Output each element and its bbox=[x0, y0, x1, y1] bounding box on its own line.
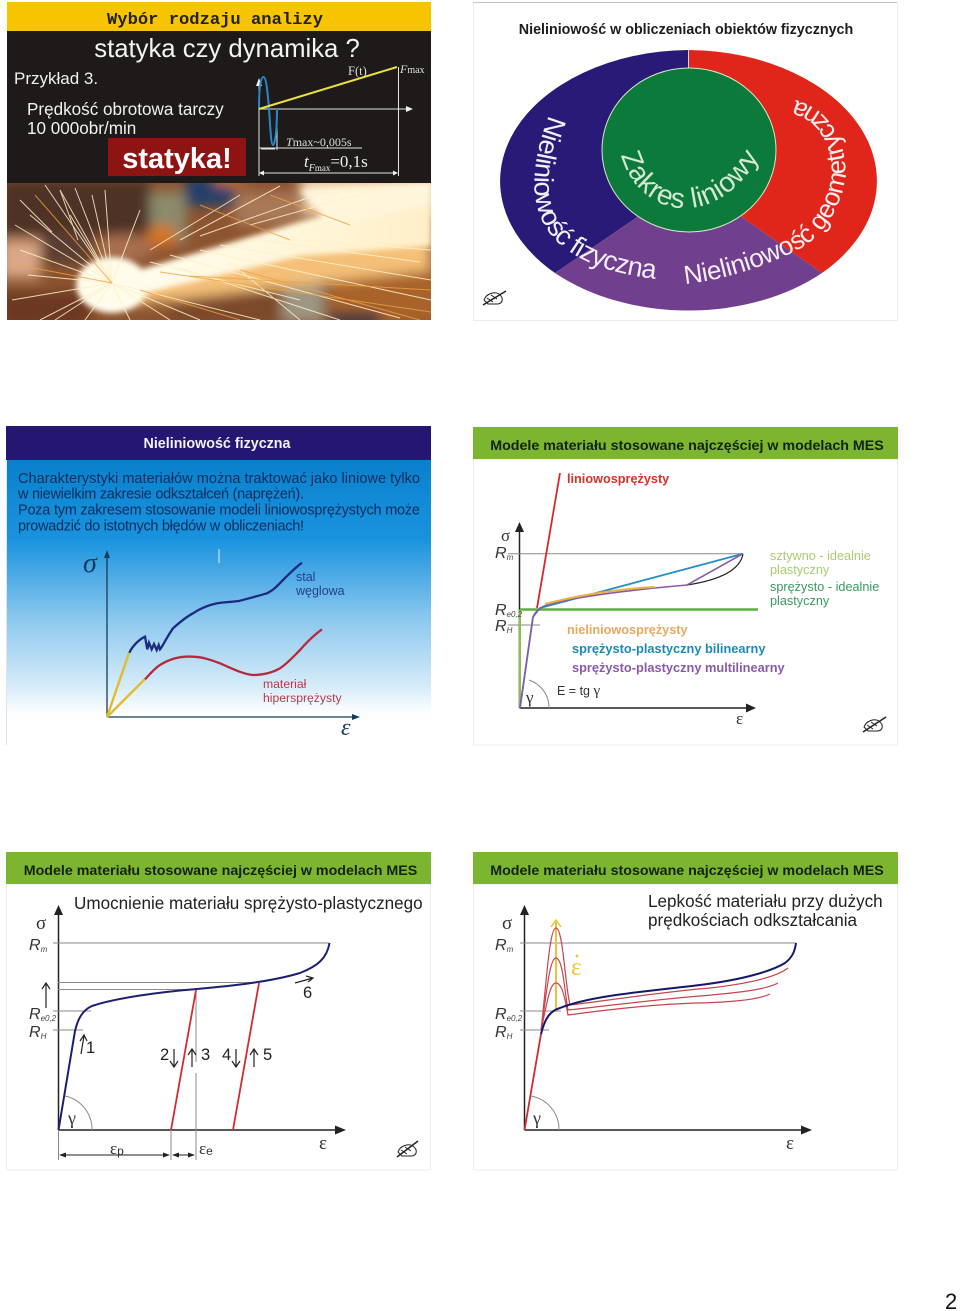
chart: strain-rate curves: R bbox=[495, 937, 507, 954]
chart: strain-rate curves: γ bbox=[532, 1108, 541, 1128]
chart: hardening curve: m bbox=[41, 945, 48, 954]
heading: hardening: Umocnienie materiału sprężysto-plastycznego bbox=[74, 894, 423, 913]
panel: umocnienie materiału bbox=[6, 852, 431, 1170]
heading: viscosity: prędkościach odkształcania bbox=[648, 911, 858, 930]
chart: hardening curve: e0,2 bbox=[41, 1014, 57, 1023]
chart: material models: γ bbox=[525, 688, 534, 707]
header band: Modele materiału stosowane najczęściej w modelach MES bbox=[490, 438, 884, 454]
chart: material models: R bbox=[495, 602, 507, 619]
chart: strain-rate curves bbox=[495, 905, 812, 1154]
label: Zakres liniowy: Zakres liniowy bbox=[621, 149, 759, 208]
chart: stress-strain curves bbox=[83, 548, 360, 741]
chart: force over time: F(t) bbox=[348, 64, 367, 78]
labels: load steps: 4 bbox=[222, 1046, 231, 1064]
chart: material models: ε bbox=[736, 709, 743, 728]
header band: Nieliniowość fizyczna bbox=[144, 436, 292, 452]
chart: strain-rate curves: m bbox=[507, 945, 514, 954]
panel: nieliniowość w obliczeniach bbox=[473, 2, 898, 321]
header band bbox=[6, 426, 431, 460]
chart: material models: R bbox=[495, 545, 507, 562]
heading: statyka czy dynamika: statyka czy dynamika ? bbox=[94, 35, 360, 63]
label: carbon steel: węglowa bbox=[295, 584, 345, 598]
callout: statyka: statyka! bbox=[122, 143, 232, 175]
header band: Modele materiału stosowane najczęściej w modelach MES bbox=[490, 863, 884, 879]
text: description: prowadzić do istotnych błędów w obliczeniach! bbox=[18, 518, 304, 534]
icon: writing hand bbox=[863, 717, 886, 732]
diagram: nonlinearity ellipse bbox=[500, 50, 877, 310]
segment: linear range bbox=[602, 68, 776, 232]
text: description: Poza tym zakresem stosowanie modeli liniowosprężystych może bbox=[18, 502, 420, 518]
panel: lepkość materiału bbox=[473, 852, 898, 1170]
chart: force over time: Tmax~0,005s bbox=[286, 135, 352, 149]
chart: force over time: t bbox=[304, 152, 310, 171]
text: description: w niewielkim zakresie odkształceń (naprężeń). bbox=[17, 486, 304, 502]
chart: strain-rate curves: R bbox=[495, 1006, 507, 1023]
segment: geometric nonlinearity bbox=[689, 50, 877, 273]
header band: Wybór rodzaju analizy: Wybór rodzaju analizy bbox=[107, 10, 323, 29]
label: hyperelastic material: materiał bbox=[263, 677, 307, 691]
header band: Wybór rodzaju analizy bbox=[7, 2, 431, 31]
label: carbon steel: stal bbox=[296, 570, 315, 584]
label: elastic ideally plastic: plastyczny bbox=[770, 594, 830, 608]
panel: nieliniowość fizyczna bbox=[6, 426, 431, 745]
curve: carbon steel bbox=[129, 563, 302, 653]
segment: overlap of nonlinearities bbox=[555, 150, 822, 311]
chart: force over time: max bbox=[315, 163, 331, 173]
label: bilinear: sprężysto-plastyczny bilinearny bbox=[572, 641, 766, 656]
panel: modele materiału 1 bbox=[473, 427, 898, 745]
chart: force over time: Fmax bbox=[399, 62, 425, 76]
chart: hardening curve: ε bbox=[199, 1139, 206, 1158]
chart: hardening curve: R bbox=[29, 937, 41, 954]
chart: force over time: F bbox=[308, 163, 316, 174]
text: disc rotation speed: 10 000obr/min bbox=[27, 119, 136, 138]
segment: physical nonlinearity bbox=[500, 50, 688, 273]
chart: material models: σ bbox=[501, 526, 510, 545]
icon: writing hand bbox=[483, 291, 506, 305]
chart: material models: m bbox=[507, 553, 514, 562]
photo: grinder sparks bbox=[7, 183, 431, 320]
chart: hardening curve: R bbox=[29, 1006, 41, 1023]
labels: load steps: 6 bbox=[303, 984, 312, 1002]
label: multilinear: sprężysto-plastyczny multilinearny bbox=[572, 660, 786, 675]
labels: load steps: 5 bbox=[263, 1046, 272, 1064]
chart: strain-rate curves: R bbox=[495, 1024, 507, 1041]
chart: material models bbox=[495, 472, 879, 728]
label: strain rate: ε bbox=[571, 954, 582, 981]
labels: load steps: 2 bbox=[160, 1046, 169, 1064]
heading: viscosity: Lepkość materiału przy dużych bbox=[648, 892, 883, 911]
label: Nieliniowość fizyczna: Nieliniowość fizyczna bbox=[534, 117, 656, 279]
chart: material models: H bbox=[507, 626, 513, 635]
chart: hardening curve: H bbox=[41, 1032, 47, 1041]
chart: strain-rate curves: e0,2 bbox=[507, 1014, 523, 1023]
chart: material models: e0,2 bbox=[507, 610, 523, 619]
chart: hardening curve: R bbox=[29, 1024, 41, 1041]
labels: load steps: 1 bbox=[86, 1039, 95, 1057]
chart: strain-rate curves: H bbox=[507, 1032, 513, 1041]
chart: hardening curve bbox=[29, 905, 346, 1160]
chart: force over time bbox=[256, 62, 425, 176]
chart: hardening curve: e bbox=[206, 1144, 213, 1158]
header band bbox=[6, 852, 431, 884]
label: linear elastic: liniowosprężysty bbox=[567, 472, 669, 486]
panel: statyka czy dynamika bbox=[0, 2, 440, 327]
chart: stress-strain curves: ε bbox=[341, 715, 351, 741]
chart: hardening curve: σ bbox=[36, 913, 46, 934]
text: example number: Przykład 3. bbox=[14, 69, 98, 88]
chart: strain-rate curves: ε bbox=[786, 1133, 794, 1154]
label: Nieliniowość geometryczna: Nieliniowość geometryczna bbox=[684, 100, 846, 284]
label: hyperelastic material: hipersprężysty bbox=[263, 691, 342, 705]
chart: strain-rate curves: σ bbox=[502, 913, 512, 934]
chart: hardening curve: γ bbox=[67, 1108, 76, 1128]
chart: material models: R bbox=[495, 618, 507, 635]
chart: hardening curve: p bbox=[117, 1144, 124, 1158]
callout: statyka bbox=[108, 138, 246, 176]
label: nonlinear elastic: nieliniowosprężysty bbox=[567, 623, 688, 637]
header band: Modele materiału stosowane najczęściej w modelach MES bbox=[24, 863, 417, 879]
label: elastic ideally plastic: sprężysto - idealnie bbox=[770, 580, 879, 594]
text: description: Charakterystyki materiałów można traktować jako liniowe tylko bbox=[18, 471, 420, 487]
heading: panel 2 title: Nieliniowość w obliczeniach obiektów fizycznych bbox=[519, 22, 853, 38]
icon: writing hand bbox=[397, 1141, 418, 1157]
label: rigid ideally plastic: sztywno - idealnie bbox=[770, 549, 871, 563]
chart: hardening curve: ε bbox=[319, 1133, 327, 1154]
header band bbox=[473, 427, 898, 459]
header band bbox=[473, 852, 898, 884]
chart: stress-strain curves: σ bbox=[83, 548, 98, 579]
curve: hyperelastic material bbox=[145, 629, 322, 679]
text: disc rotation speed: Prędkość obrotowa tarczy bbox=[27, 100, 224, 119]
chart: hardening curve: ε bbox=[110, 1139, 117, 1158]
chart: force over time: =0,1s bbox=[330, 152, 368, 171]
labels: load steps: 3 bbox=[201, 1046, 210, 1064]
label: rigid ideally plastic: plastyczny bbox=[770, 563, 830, 577]
chart: material models: E = tg γ bbox=[557, 683, 600, 699]
